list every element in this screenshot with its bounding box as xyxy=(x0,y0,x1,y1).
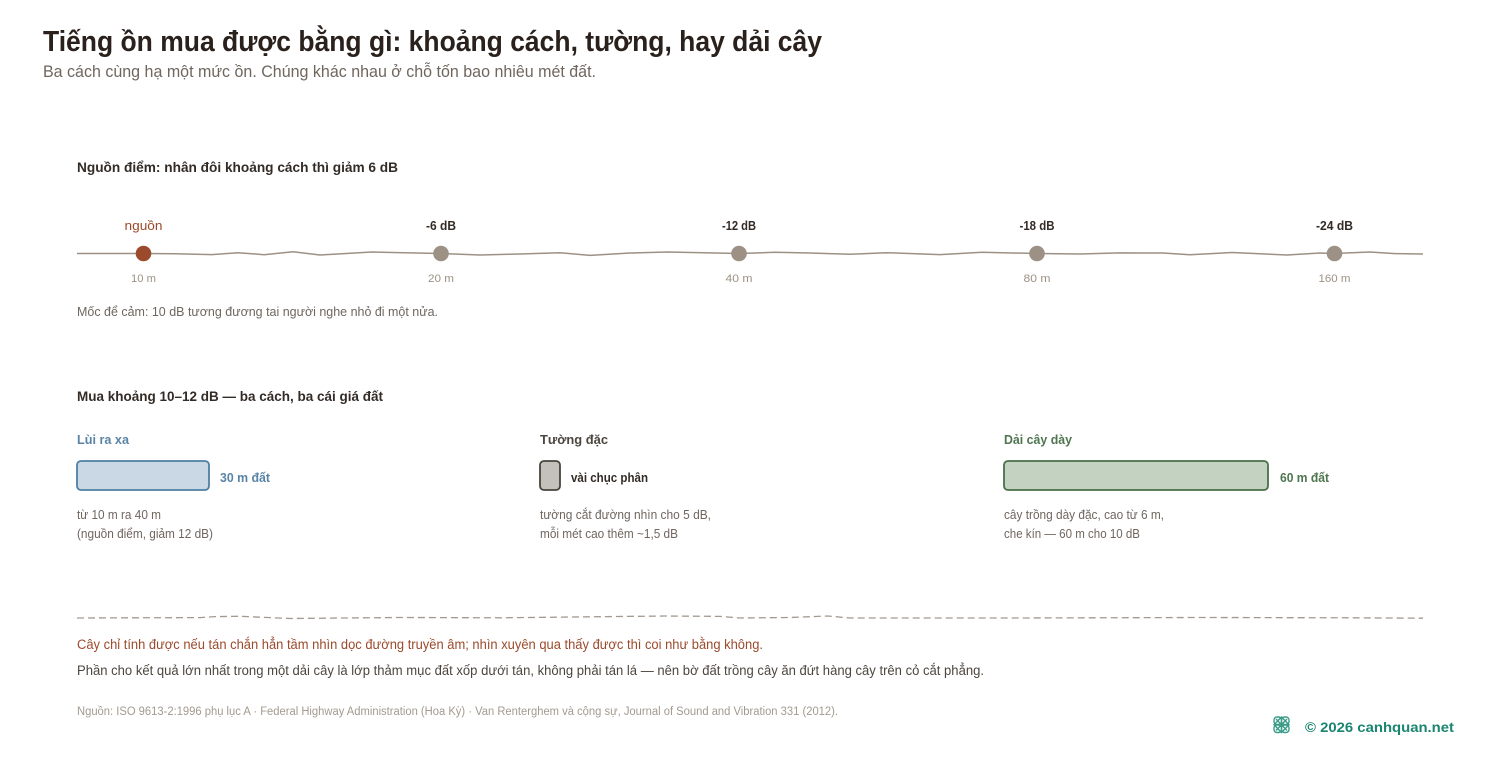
method: solid wall xyxy=(540,432,711,541)
method: move away: từ 10 m ra 40 m xyxy=(77,508,161,522)
marker: -18 dB 80 m xyxy=(1020,218,1054,285)
method: dense tree belt: cây trồng dày đặc, cao từ 6 m, xyxy=(1004,508,1164,522)
method: move away: Lùi ra xa xyxy=(77,432,130,447)
marker: -6 dB 20 m xyxy=(426,218,456,285)
marker: source 10 m: nguồn xyxy=(124,218,162,233)
subtitle: Ba cách cùng hạ một mức ồn. Chúng khác nhau ở chỗ tốn bao nhiêu mét đất. xyxy=(43,62,596,81)
method: dense tree belt: che kín — 60 m cho 10 dB xyxy=(1004,527,1140,541)
brand credit: © 2026 canhquan.net xyxy=(1305,719,1454,735)
callout: canopy warning: Cây chỉ tính được nếu tán chắn hẳn tầm nhìn dọc đường truyền âm; nhìn xuyên qua thấy được thì coi như bằng không. xyxy=(77,637,763,652)
method: dense tree belt: 60 m đất xyxy=(1280,471,1330,485)
marker: -24 dB 160 m: -24 dB xyxy=(1316,218,1353,233)
heading: three methods: Mua khoảng 10–12 dB — ba cách, ba cái giá đất xyxy=(77,388,383,404)
icon: logo knot xyxy=(1274,717,1289,732)
marker: -24 dB 160 m: 160 m xyxy=(1318,273,1350,285)
method: solid wall: tường cắt đường nhìn cho 5 dB, xyxy=(540,507,711,522)
title: Tiếng ồn mua được bằng gì: khoảng cách, tường, hay dải cây xyxy=(43,24,822,58)
marker: source 10 m xyxy=(124,218,162,285)
method: solid wall: mỗi mét cao thêm ~1,5 dB xyxy=(540,526,678,541)
marker: -18 dB 80 m: 80 m xyxy=(1024,273,1050,285)
marker: -12 dB 40 m: 40 m xyxy=(726,273,752,285)
marker: source 10 m: 10 m xyxy=(131,273,156,285)
marker: -12 dB 40 m: -12 dB xyxy=(722,218,756,233)
method: move away: (nguồn điểm, giảm 12 dB) xyxy=(77,527,213,541)
method: move away: 30 m đất xyxy=(220,471,271,485)
method: solid wall: vài chục phân xyxy=(571,471,648,485)
method: dense tree belt: Dải cây dày xyxy=(1004,432,1073,447)
marker: -12 dB 40 m xyxy=(722,218,756,285)
method: solid wall: Tường đặc xyxy=(540,432,608,447)
callout: soil layer note: Phần cho kết quả lớn nhất trong một dải cây là lớp thảm mục đất xốp dưới tán, không phải tán lá — nên bờ đất trồng cây ăn đứt hàng cây trên cỏ cắt phẳng. xyxy=(77,663,984,678)
panel: point source distance scale xyxy=(77,159,1423,319)
marker: -24 dB 160 m xyxy=(1316,218,1353,285)
source citation: Nguồn: ISO 9613-2:1996 phụ lục A · Federal Highway Administration (Hoa Kỳ) · Van Renterghem và cộng sự, Journal of Sound and Vibration 331 (2012). xyxy=(77,706,838,718)
marker: -6 dB 20 m: -6 dB xyxy=(426,218,456,233)
note: perception benchmark: Mốc để cảm: 10 dB tương đương tai người nghe nhỏ đi một nửa. xyxy=(77,305,438,319)
marker: -6 dB 20 m: 20 m xyxy=(428,273,454,285)
marker: -18 dB 80 m: -18 dB xyxy=(1020,218,1054,233)
heading: point source: Nguồn điểm: nhân đôi khoảng cách thì giảm 6 dB xyxy=(77,159,398,175)
wavy distance line xyxy=(77,252,1423,255)
method: dense tree belt xyxy=(1004,432,1330,541)
method: move away xyxy=(77,432,271,541)
panel: three methods comparison xyxy=(77,388,1330,541)
